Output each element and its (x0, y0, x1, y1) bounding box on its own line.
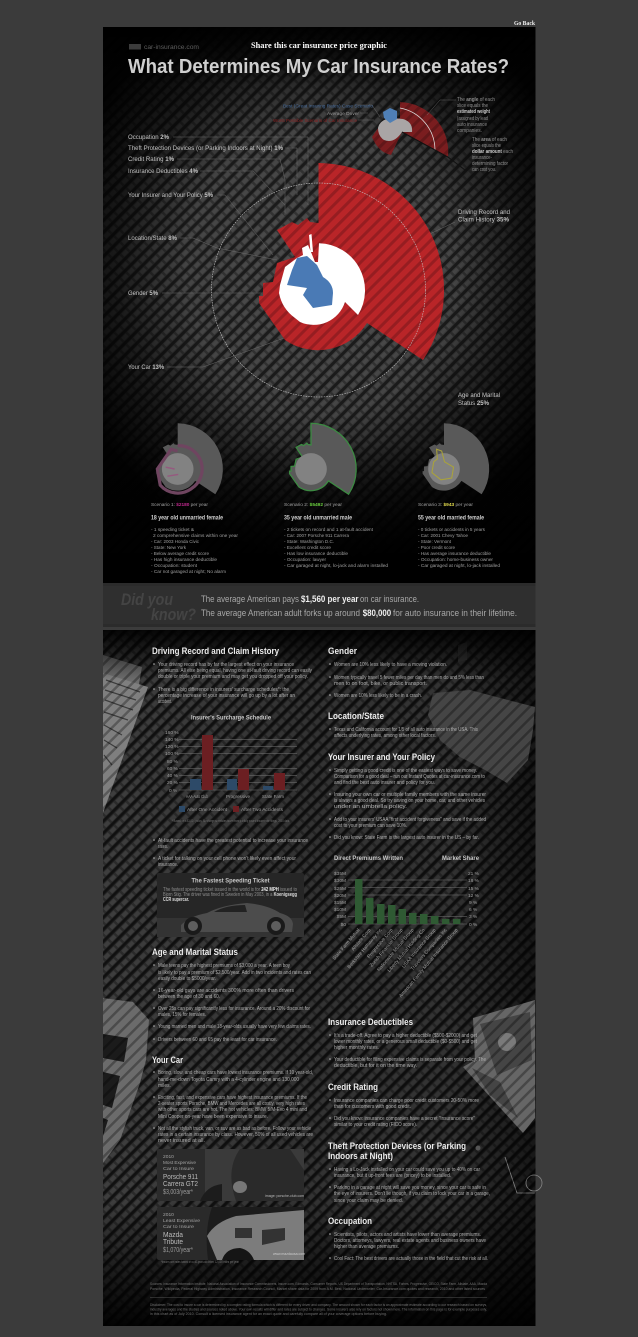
section: age and marital status: Male teens pay the highest premiums of $3,000 a year. A teen boy (158, 963, 290, 969)
scenario 3 text (418, 502, 500, 568)
section: your insurer and your policy: and find the best auto insurer and policy for you. (334, 780, 435, 786)
section: your car: Exciting, fast, and expensive cars have highest insurance premiums. If the (158, 1095, 307, 1101)
company labels: Liberty Mutual Holding Co (386, 927, 427, 974)
slice labels, left: Location/State 8% (128, 235, 177, 242)
decor: dollar bills (463, 1000, 535, 1133)
go back link: Go Back (514, 21, 536, 27)
section: insurance deductibles: deductible, but for it on the time way. (334, 1063, 417, 1069)
section: your car: Boring, slow, and cheap cars have lowest insurance premiums. If 10 year-old, (158, 1070, 313, 1076)
section: gender: men to on foot, bike, or public transport. (334, 681, 427, 687)
left axis: $15M (334, 900, 346, 906)
scenario chart 1 (156, 423, 223, 494)
note: angle of slice: (assigned by lead (457, 116, 488, 122)
share heading: Share this car insurance price graphic (251, 41, 387, 50)
scenario 3 text: - Has average insurance deductible (418, 551, 491, 556)
scenario 1 text: - Car: 2003 Honda Civic (151, 539, 200, 544)
section: theft protection devices: Indoors at Night) (328, 1151, 393, 1161)
company labels: USAA Insurance Group (401, 927, 438, 969)
slice labels, left: Your Insurer and Your Policy 5% (128, 192, 213, 199)
fact line 1: The average American pays (201, 593, 299, 604)
company labels: Progressive Corp (366, 927, 395, 960)
driving record bullets continued: rates. (158, 844, 168, 850)
footer: sources and disclaimer: industry averages and the studies and sources noted above. Your own results will differ and rates are subject to changes. Some insurers also rely on factors not shown here. The information on this page is for example purposes only, (150, 1308, 487, 1312)
scenario 1 text: - Below average credit score (151, 551, 209, 556)
scenario 1 text: - Occupation: student (151, 563, 198, 568)
scenario 3 text: Scenario 3: $943 per year (418, 502, 473, 508)
site logo: car-insurance.com (144, 44, 199, 51)
x labels: State Farm (262, 794, 284, 800)
right axis: 3 % (469, 914, 478, 920)
bar chart: insurer's surcharge schedule: * Based on a $1,000 policy. Surcharge schedules taken from publicly posted insurer rate filings, 2010 data. (172, 819, 290, 823)
callout: fastest speeding ticket: The fastest speeding ticket issued in the world is for 242 MPH issued to (163, 887, 297, 893)
section: age and marital status (152, 947, 311, 1043)
scenario 1 text: Scenario 1: $2180 per year (151, 502, 208, 508)
company labels: State Farm Mutual (332, 927, 362, 962)
company labels: Zurich Financial Group (369, 927, 405, 968)
company labels (332, 927, 460, 999)
left axis: $20M (334, 893, 346, 899)
radial chart: main driver slices (212, 163, 444, 397)
fact line 2: $80,000 (363, 607, 391, 618)
chart legend (179, 806, 284, 813)
card: most expensive car: Porsche 911 (163, 1174, 198, 1181)
scenario 1 text: 18 year old unmarried female (151, 514, 223, 522)
note: angle of slice: auto insurance (457, 122, 487, 128)
card: least expensive car: Mazda (163, 1232, 183, 1239)
section: credit rating: Did you know: insurance companies have a secret "insurance score" (334, 1116, 475, 1122)
note: angle of slice (457, 97, 495, 134)
section: insurance deductibles: lower monthly rates, or a generous small deductible ($0-$500) and get (334, 1039, 477, 1045)
title: What Determines My Car Insurance Rates? (128, 55, 509, 78)
slice labels, right: Driving Record and (458, 209, 510, 216)
card: most expensive car: Car to Insure (163, 1166, 194, 1172)
left axis: $35M (334, 871, 346, 877)
callout: fastest speeding ticket (157, 873, 304, 937)
left axis: $25M (334, 886, 346, 892)
right axis: 18 % (468, 878, 480, 884)
left axis: $5M (337, 914, 346, 920)
fact line 1: $1,560 per year (301, 593, 359, 604)
bar chart: insurer's surcharge schedule: Insurer's Surcharge Schedule (191, 714, 271, 722)
section: your insurer and your policy (328, 752, 486, 841)
note: area of slice (472, 137, 513, 173)
note: angle of slice: slice equals the (457, 103, 488, 109)
section: insurance deductibles: higher monthly rates. (334, 1045, 379, 1051)
section: your car: hand-me-down Toyota Camry with a 4-cylinder engine and 130,000 (158, 1077, 299, 1083)
driving record bullets continued: A ticket for talking on your cell phone won't likely even affect your (158, 856, 296, 862)
scenario 2 text: - Car garaged at night, lo-jack and alarm installed (284, 563, 388, 568)
left axis: $0 (341, 922, 346, 928)
legend radial chart (355, 100, 465, 170)
bar chart: direct premiums written and market share: Market Share (442, 855, 479, 862)
driving record bullets continued: At-fault accidents have the greatest potential to increase your insurance (158, 838, 308, 844)
card: most expensive car: Most Expensive (163, 1160, 196, 1166)
card: least expensive car: Least Expensive (163, 1218, 200, 1224)
card: least expensive car: Car to Insure (163, 1224, 194, 1230)
right axis: 0 % (469, 922, 478, 928)
scenario 3 text: - Poor credit score (418, 545, 455, 550)
chart legend: After Two Accidents (241, 807, 284, 813)
section: location/state: Texas and California account for 1/5 of all auto insurance in the USA. This (334, 727, 478, 733)
section: your car: never insured at all. (158, 1138, 205, 1144)
bars (190, 735, 285, 790)
section: age and marital status: Young married men and male 18-year-olds usually have very few claims rates. (158, 1024, 311, 1030)
y axis: 80 % (167, 759, 179, 765)
card: least expensive car: 2010 (163, 1212, 174, 1218)
slice labels, left: Insurance Deductibles 4% (128, 168, 198, 175)
section: your car: 2-seater sports Porsche, BMW and Mercedes are all costly, very high rates (158, 1101, 305, 1107)
legend labels: Worst Possible Scenario of Car Insurance (273, 118, 357, 124)
did you know band (103, 583, 536, 627)
section: insurance deductibles: It's a trade-off. Agree to pay a higher deductible ($500-$2000) and get (334, 1033, 477, 1039)
panel: top radial chart section (103, 27, 536, 583)
scenario 3 text: 55 year old married female (418, 514, 484, 522)
section: age and marital status: Over 25s can pay significantly less for insurance. Around a 20% discount for (158, 1006, 310, 1012)
section: your car (152, 1055, 313, 1144)
section: occupation: Scientists, pilots, actors and artists have lower than average premiums. (334, 1232, 481, 1238)
section: your insurer and your policy: Simply getting a good credit is one of the easiest ways to save money. (334, 768, 477, 774)
bar chart: insurer's surcharge schedule (165, 714, 297, 823)
fact line 2: for auto insurance in their lifetime. (393, 607, 517, 618)
panel: details section (103, 630, 542, 1326)
section: driving record: percentage increase of your insurance will go up by a lot after an (158, 693, 295, 699)
y axis: 120 % (165, 744, 179, 750)
section: your insurer and your policy: is always a good deal. So try saving on your home, car, and other vehicles (334, 798, 485, 804)
driving record bullets continued (153, 838, 308, 868)
legend labels (273, 104, 373, 124)
stripes over decor (103, 630, 536, 1326)
section: gender: Women typically travel 5 fewer miles per day than men do and 5% less than (334, 675, 484, 681)
note: angle of slice: companies. (457, 128, 482, 134)
scenario 2 text: - State: Washington D.C. (284, 539, 334, 544)
note: area of slice: slice equals the (472, 143, 501, 149)
bars (355, 879, 460, 924)
section: your insurer and your policy: Your Insurer and Your Policy (328, 752, 435, 762)
decor: steering wheel (103, 998, 149, 1163)
scenario 1 text: - Has high insurance deductible (151, 557, 217, 562)
scenario 1 text: - State: New York (151, 545, 187, 550)
company labels: Allstate Corp (350, 927, 373, 952)
driving record bullets continued: insurance. (158, 862, 178, 868)
section: theft protection devices: Having a Lo-Jack installed on your car could save you up to 40% on car (334, 1167, 480, 1173)
section: your car: with other sports cars are hot. The hot vehicles: BMW 5/M-Evo 4 mini and (157, 1107, 307, 1113)
section: occupation: higher than average premiums. (334, 1244, 399, 1250)
section: age and marital status: is likely to pay a premium of $2,500/year. Add in two incidents and rates can (158, 970, 311, 976)
section: age and marital status: Age and Marital Status (152, 947, 238, 957)
y axis: 100 % (165, 751, 179, 757)
legend labels: Average Driver (327, 111, 359, 117)
slice labels, right (458, 209, 510, 407)
section: your insurer and your policy: Comparison for a good deal – run our Instant Quotes at car-insurance.com to (334, 774, 485, 780)
bar chart: direct premiums written and market share: Direct Premiums Written (334, 855, 403, 862)
legend labels: Best (Great Insuring Rates) Case Scenario (283, 104, 373, 110)
section: driving record (152, 646, 312, 705)
scenario 3 text: - Occupation: home-business owner (418, 557, 493, 562)
section: credit rating: Credit Rating (328, 1082, 378, 1092)
slice labels, right: Claim History 35% (458, 216, 509, 224)
section: your insurer and your policy: Did you know: State Farm is the largest auto insurer in the US – by far. (334, 835, 479, 841)
company labels: Berkshire Hathaway Inc (346, 927, 384, 970)
fact line 2 (201, 607, 517, 618)
footer: sources and disclaimer: Disclaimer: The cost to insure a car is determined by a complex rating formula which is different for every driver and company. The amount shown for each factor is an approximate estimate according to our research based on surveys, (150, 1303, 487, 1307)
scenario 2 text (284, 502, 388, 568)
section: occupation: Cool Fact: The best drivers are actually those in the field that cut the risk at all. (334, 1256, 488, 1262)
y axis (165, 730, 179, 794)
fact line 1 (201, 593, 419, 604)
section: your car: miles. (158, 1083, 171, 1089)
did you know label: Did you (121, 590, 174, 609)
y axis: 140 % (165, 737, 179, 743)
footer: sources and disclaimer: in this chart as of July 2010. Consult a licensed insurance agent for an exact quote and carefully compare all of your coverage options before buying. (150, 1312, 387, 1316)
right axis: 9 % (469, 900, 478, 906)
section: theft protection devices: since your claim may be denied. (334, 1198, 403, 1204)
best-case blue slices (287, 256, 333, 308)
slice labels, left: Theft Protection Devices (or Parking Indoors at Night) 1% (128, 145, 283, 152)
section: age and marital status: easily double to $5000/year. (158, 976, 216, 982)
x labels: Progressive (226, 794, 250, 800)
card: most expensive car: 2010 (163, 1154, 174, 1160)
card: most expensive car: image: porsche-club.com (265, 1194, 304, 1198)
section: occupation (328, 1216, 488, 1262)
scenario 3 text: - Car garaged at night, lo-jack installed (418, 563, 500, 568)
y axis: 0 % (169, 788, 178, 794)
section: credit rating (328, 1082, 479, 1128)
note: area of slice: The area of each (472, 137, 507, 143)
decor: car keys (476, 1146, 542, 1193)
did you know label: know? (151, 605, 197, 624)
card: most expensive car (157, 1149, 304, 1201)
section: occupation: Occupation (328, 1216, 372, 1226)
section: your car: rates in a certain insurance by class. However, 50% of all used vehicles are (158, 1132, 313, 1138)
card: least expensive car (157, 1207, 305, 1264)
section: theft protection devices: Theft Protection Devices (or Parking (328, 1141, 466, 1151)
scenario 2 text: - Occupation: lawyer (284, 557, 326, 562)
section: age and marital status: between the age of 30 and 60. (158, 994, 220, 1000)
section: driving record: accident. (158, 699, 172, 705)
left axis: $10M (334, 907, 346, 913)
section: driving record: premiums. All else being equal, having one at-fault driving record can easily (158, 668, 312, 674)
scenario 1 text: 2 comprehensive claims within one year (153, 533, 238, 538)
company labels: Nationwide Mutual Group (376, 927, 416, 973)
scenario 3 text: - Car: 2001 Chevy Tahoe (418, 533, 468, 538)
bar chart: direct premiums written and market share (332, 855, 480, 999)
section: insurance deductibles: Your deductible for filing expensive claims is separate from your policy. The (334, 1057, 486, 1063)
slice labels, right: Age and Marital (458, 392, 500, 399)
right axis: 6 % (469, 907, 478, 913)
icon: supercar (157, 903, 304, 937)
leader lines (162, 137, 455, 367)
scenario 1 text: - 1 speeding ticket & (151, 527, 194, 532)
y axis: 160 % (165, 730, 179, 736)
scenario chart 3 (423, 423, 489, 494)
section: gender: Gender (328, 646, 357, 656)
dashed reference circle (212, 183, 426, 397)
section: your car: Your Car (152, 1055, 183, 1065)
note: area of slice: dollar amount each (472, 149, 513, 155)
right axis: 15 % (468, 886, 480, 892)
decor: insurance papers (103, 655, 148, 813)
slice labels, left (128, 134, 283, 371)
decor: us map (428, 642, 535, 783)
section: occupation: Doctors, attorneys, lawyers, real estate agents and business owners have (334, 1238, 486, 1244)
slice labels, left: Your Car 13% (128, 364, 164, 371)
section: location/state: affects underlying rates, among other local factors. (334, 733, 436, 739)
section: age and marital status: Drivers between 60 and 65 pay the least for car insurance. (158, 1037, 277, 1043)
slice labels, right: Status 25% (458, 400, 489, 407)
slice labels, left: Occupation 2% (128, 134, 169, 141)
section: location/state: Location/State (328, 711, 384, 721)
note: area of slice: insurance- (472, 155, 492, 161)
section: insurance deductibles (328, 1017, 486, 1069)
section: your insurer and your policy: cost to your premium can save 10%. (334, 823, 407, 829)
section: driving record: Driving Record and Claim History (152, 646, 279, 656)
section: driving record: Your driving record has by far the largest effect on your insurance (158, 662, 294, 668)
card: least expensive car: $1,070/year* (163, 1247, 193, 1254)
fact line 1: on car insurance. (360, 593, 419, 604)
section: driving record: double or triple your premium and may get you dropped off your policy. (158, 674, 308, 680)
y axis: 20 % (167, 780, 179, 786)
card: most expensive car: $3,003/year* (163, 1189, 193, 1196)
section: credit rating: Insurance companies can charge poor credit customers 20-50% more (334, 1098, 479, 1104)
section: your insurer and your policy: Add to your insurers' USAA "first accident forgiveness" and save if the added (334, 817, 486, 823)
slice labels, left: Credit Rating 1% (128, 156, 174, 163)
section: your car: Mini Cooper on-year have been expensive to insure. (158, 1114, 268, 1120)
fact line 2: The average American adult forks up around (201, 607, 360, 618)
company labels: Travelers Companies Inc (410, 927, 449, 972)
x labels (186, 794, 284, 800)
scenario 2 text: - Car: 2007 Porsche 911 Carrera (284, 533, 349, 538)
company labels: American Family Mutual Insurance Group (398, 927, 460, 999)
section: credit rating: similar to your credit rating (FICO score). (334, 1122, 417, 1128)
section: credit rating: than for customers with good credit. (334, 1104, 411, 1110)
scenario 1 text: - Car not garaged at night; No alarm (151, 569, 226, 574)
section: theft protection devices: Parking in a garage at night will save you money, since your car is safe in (334, 1185, 486, 1191)
section: theft protection devices (328, 1141, 490, 1204)
y axis: 40 % (167, 773, 179, 779)
callout: fastest speeding ticket: The Fastest Speeding Ticket (192, 878, 270, 884)
right axis: 21 % (468, 871, 480, 877)
scenario 2 text: - 2 tickets on record and 1 at-fault accident (284, 527, 374, 532)
callout: fastest speeding ticket: CCR supercar. (163, 897, 189, 903)
left axis (334, 871, 346, 928)
scenario 2 text: - Excellent credit score (284, 545, 331, 550)
section: age and marital status: 16-year-old guys are accidents 300% more often than drivers (158, 988, 294, 994)
section: insurance deductibles: Insurance Deductibles (328, 1017, 413, 1027)
footer: sources and disclaimer (150, 1282, 487, 1316)
scenario chart 2 (290, 423, 356, 494)
slice labels, left: Gender 5% (128, 290, 158, 297)
footer: sources and disclaimer: Porsche, Wikipedia, Federal Highway Administration, Insurance Research Council, Market share data for 2009 from A.M. Best, National Underwriter, Car-Insurance.com quotes and research, 2010 and other listed sources (150, 1287, 485, 1291)
card: most expensive car: Carrera GT2 (163, 1181, 198, 1188)
x labels: AAA Auto Club (186, 794, 208, 800)
scenario 3 text: - State: Vermont (418, 539, 452, 544)
average-driver white slices (279, 234, 365, 325)
section: gender: Women are 10% less likely to be in a crash. (334, 693, 422, 699)
worst-case red slices (259, 163, 444, 360)
right axis (468, 871, 480, 928)
section: theft protection devices: the eye of insurers. Don't lie though, if you claim to lock your car in a garage, (334, 1191, 490, 1197)
left axis: $30M (334, 878, 346, 884)
card: least expensive car: Tribute (163, 1239, 183, 1246)
scenario 2 text: Scenario 2: $5492 per year (284, 502, 342, 508)
footer: sources and disclaimer: Sources: Insurance Information Institute, National Association of Insurance Commissioners, Insure.com, Edmunds, Consumer Reports, US Department of Transportation, NHTSA, Forbes, Progressive, GEICO, State Farm, Allstate, AAA, Mazda (150, 1282, 487, 1286)
scenario 2 text: 35 year old unmarried male (284, 514, 352, 522)
section: your insurer and your policy: under an umbrella policy. (334, 804, 408, 810)
scenario 3 text: - 0 tickets or accidents in 5 years (418, 527, 486, 532)
section: age and marital status: males, 15% for females. (158, 1012, 206, 1018)
note: angle of slice: The angle of each (457, 97, 495, 103)
section: gender (328, 646, 484, 699)
scenario 1 text (151, 502, 238, 574)
callout: fastest speeding ticket: Bjorn Stig. The driver was fined in Sweden in May 2003, in a Koenigsegg (163, 892, 297, 898)
did you know label (121, 590, 197, 624)
right axis: 12 % (468, 893, 480, 899)
card: least expensive car: www.mazdausa.com (273, 1252, 305, 1256)
section: gender: Women are 10% less likely to have a moving violation. (334, 662, 447, 668)
section: your insurer and your policy: Insuring your own car or multiple family members with the same insurer (334, 792, 486, 798)
scenario 2 text: - Has low insurance deductible (284, 551, 348, 556)
note: area of slice: determining factor (472, 161, 508, 167)
section: driving record: There is a big difference in insurers' surcharge schedules*: the (158, 687, 289, 693)
section: theft protection devices: insurance, but it up-front fees are (pricey) to be installed. (334, 1173, 451, 1179)
note: area of slice: can cost you. (472, 167, 496, 173)
section: location/state (328, 711, 478, 739)
card: least expensive car: *Insure.com rates based on a 40-year-old driver, 12,000 miles per year (161, 1260, 240, 1264)
y axis: 60 % (167, 766, 179, 772)
note: angle of slice: estimated weight (457, 109, 490, 115)
section: your car: Not all the stylish truck, van, or suv are as bad as before. Follow your vehicle (158, 1126, 311, 1132)
chart legend: After One Accident (187, 807, 228, 813)
